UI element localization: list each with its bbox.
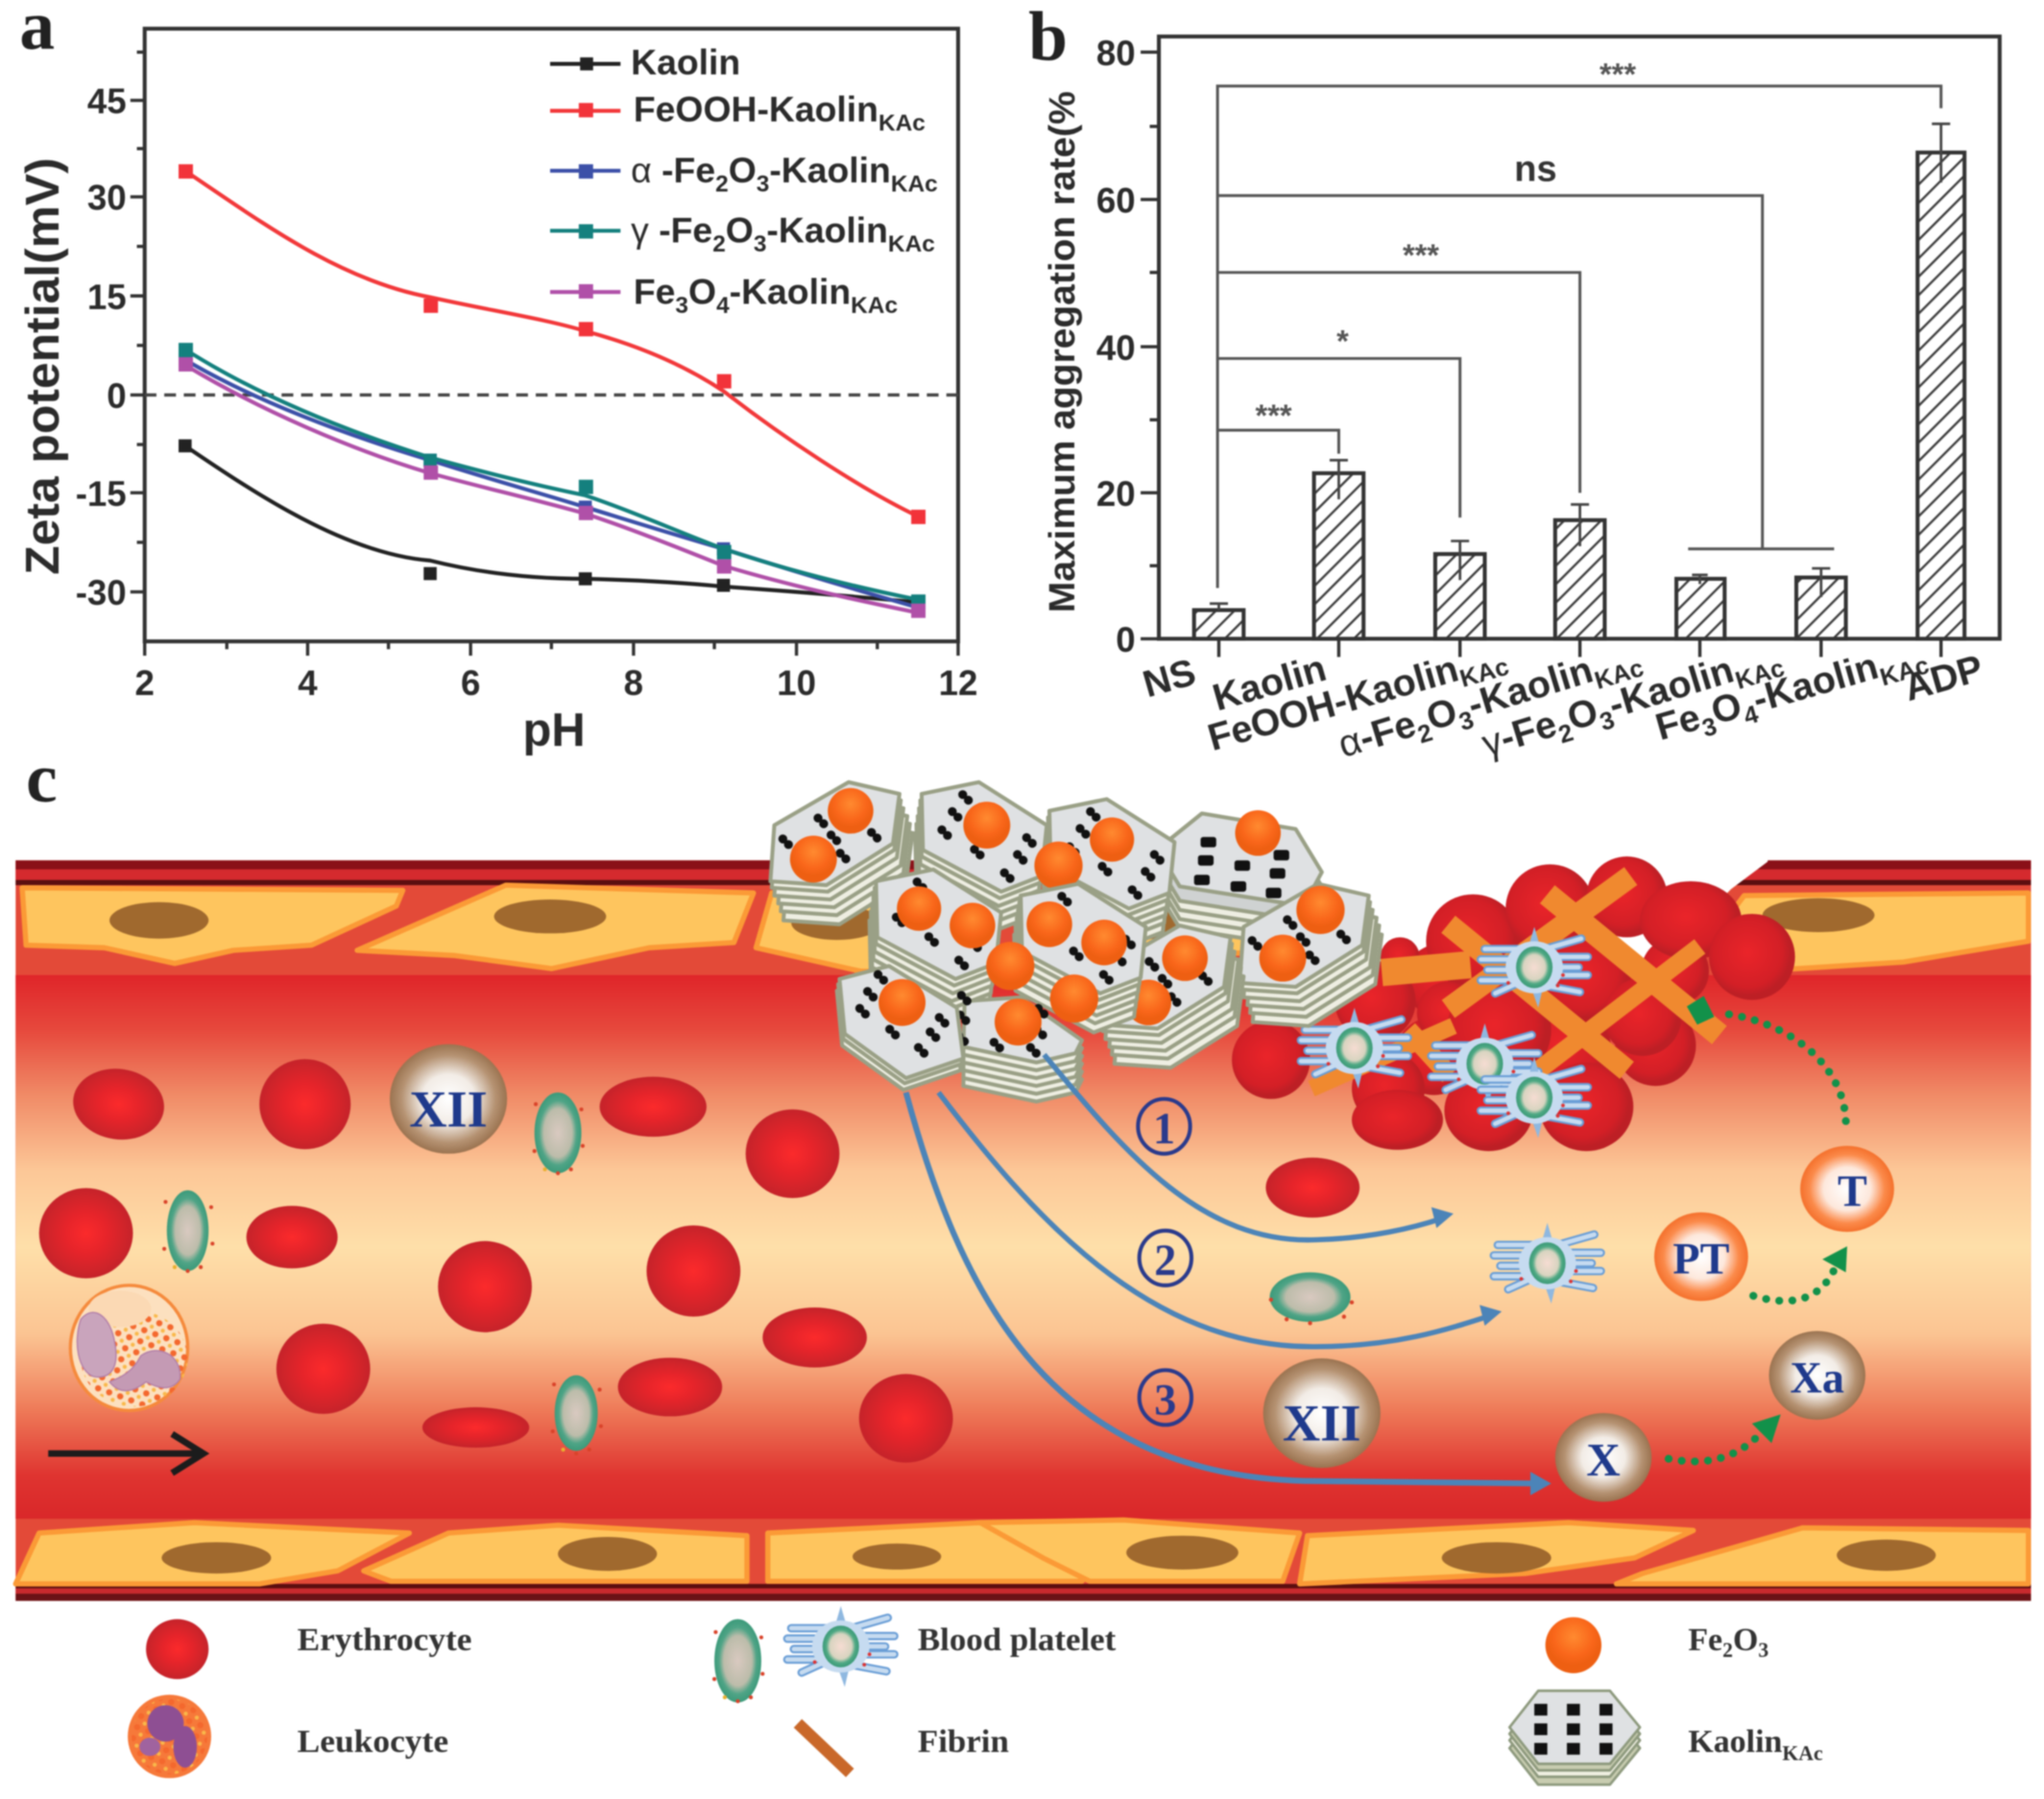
Fe2O3 key: O (1733, 1622, 1758, 1658)
rotated category labels: O (1422, 690, 1462, 739)
chart frame (1159, 36, 2000, 638)
factor X: X (1586, 1433, 1621, 1486)
series: alpha-Fe2O3-Kaolin (179, 353, 925, 609)
plate with two spheres (915, 782, 1083, 931)
factor XII in lumen (390, 1044, 507, 1154)
rotated category labels: 3 (1699, 713, 1719, 742)
chart legend: 3 (675, 293, 688, 319)
significance marks: * (1336, 324, 1349, 359)
Fe2O3 key (1546, 1618, 1768, 1673)
y tick labels: 0 (1116, 620, 1136, 660)
plate with spheres (1014, 884, 1145, 1033)
factor XII in lumen: XII (409, 1080, 488, 1138)
pathway number 3 (1140, 1370, 1191, 1425)
chart legend: KAc (888, 231, 935, 257)
rotated category labels: 3 (1597, 707, 1618, 736)
rotated category labels: Fe (1651, 696, 1705, 749)
factor XII target: XII (1283, 1395, 1361, 1452)
chart legend: -Kaolin (769, 150, 891, 190)
panel b: maximum aggregation rate bar chart (1028, 0, 2000, 772)
chart legend: KAc (851, 293, 898, 319)
leukocyte key (128, 1694, 448, 1778)
loose spheres (986, 942, 1098, 1022)
flow direction arrow (48, 1434, 204, 1474)
prothrombin PT: PT (1672, 1235, 1730, 1283)
blood platelet key (712, 1606, 1117, 1703)
error bars (1210, 124, 1950, 611)
rotated category labels: O (1562, 690, 1602, 739)
rotated category labels: 3 (1456, 707, 1477, 736)
endothelial cells (15, 885, 2029, 1584)
hatched bars (1194, 153, 1964, 638)
chart legend (550, 41, 938, 319)
x tick labels: 4 (298, 663, 318, 703)
chart legend: O (729, 150, 757, 190)
y tick labels (1096, 34, 1136, 660)
series: gamma-Fe2O3-Kaolin (179, 343, 926, 609)
chart legend: 4 (716, 293, 730, 319)
rotated category labels: KAc (1592, 655, 1647, 695)
kaolin key: KAc (1782, 1741, 1823, 1764)
rotated category labels (1139, 632, 1987, 772)
kaolin key: Kaolin (1688, 1724, 1782, 1760)
vessel wall (15, 860, 2031, 1601)
x tick labels: 2 (135, 663, 155, 703)
panel a: zeta potential line chart (17, 0, 977, 756)
panel letter c: c (26, 739, 58, 817)
significance marks: ns (1514, 150, 1557, 190)
y tick labels: 80 (1096, 34, 1136, 73)
axis ticks (1141, 52, 1941, 657)
wall rupture gap (1251, 834, 1770, 991)
plate with two spheres (1239, 884, 1382, 1026)
significance marks: *** (1403, 238, 1439, 273)
y tick labels: 45 (87, 82, 127, 121)
rotated category labels: Kaolin (1208, 647, 1331, 719)
vessel lumen (15, 975, 2031, 1519)
chart legend: KAc (878, 110, 926, 136)
significance brackets (1217, 86, 1941, 588)
panel c: blood vessel diagram (15, 782, 2031, 1601)
factor XII target (1263, 1358, 1381, 1468)
chart legend: Fe (634, 271, 675, 311)
rotated category labels: FeOOH-Kaolin (1203, 647, 1463, 759)
fibrin key: Fibrin (918, 1724, 1009, 1760)
x tick labels: 8 (624, 663, 643, 703)
pathway number 3: 3 (1154, 1375, 1176, 1424)
resting platelets (162, 1092, 1354, 1455)
erythrocytes in the lumen (39, 1059, 1359, 1463)
x tick labels: 12 (939, 663, 977, 703)
zero dashed line (145, 394, 958, 396)
y tick labels: 40 (1096, 328, 1136, 368)
factor Xa (1769, 1331, 1865, 1420)
rotated category labels: KAc (1877, 652, 1932, 691)
leukocyte key: Leukocyte (298, 1724, 448, 1760)
chart legend: KAc (891, 172, 938, 198)
kaolin-iron oxide composite cluster (770, 782, 1382, 1101)
prothrombin PT (1654, 1212, 1748, 1301)
chart legend: -Kaolin (730, 271, 851, 311)
y tick labels (76, 82, 127, 612)
y tick labels: -30 (76, 573, 127, 612)
front plate with one sphere (959, 995, 1082, 1101)
erythrocyte key: Erythrocyte (298, 1622, 472, 1658)
Fe2O3 key: Fe (1688, 1622, 1722, 1658)
plate with two spheres (1043, 799, 1174, 947)
plate with two spheres (770, 782, 912, 924)
thrombin T: T (1838, 1166, 1867, 1215)
rotated category labels: 2 (1555, 719, 1576, 749)
chart legend: O (726, 210, 754, 251)
thrombin T (1800, 1146, 1894, 1232)
pathway 2 arrow (939, 1092, 1502, 1347)
pathway number 2 (1140, 1231, 1191, 1285)
pathway number 2: 2 (1154, 1235, 1176, 1284)
series: Kaolin (179, 440, 925, 609)
rotated category labels: α-Fe (1334, 703, 1421, 766)
chart legend: -Kaolin (766, 210, 888, 251)
rotated category labels: -Kaolin (1603, 649, 1739, 727)
rotated category labels: O (1706, 684, 1746, 732)
rotated category labels: 4 (1741, 701, 1762, 731)
green arrow T to fibrin (1687, 995, 1846, 1121)
activated platelets (1301, 927, 1588, 1139)
pathway number 1: 1 (1153, 1104, 1175, 1153)
front plate with one sphere (837, 966, 963, 1090)
rotated category labels: -Kaolin (1463, 649, 1598, 727)
y tick labels: 15 (87, 277, 127, 317)
plate with two spheres (1101, 925, 1243, 1067)
x tick labels: 6 (461, 663, 480, 703)
pathway 3 arrow (906, 1092, 1551, 1496)
green arrow X to Xa (1669, 1414, 1781, 1461)
significance marks: *** (1256, 398, 1292, 433)
y tick labels: 60 (1096, 180, 1136, 220)
x axis title: pH (522, 705, 586, 756)
rotated category labels: -Kaolin (1748, 645, 1883, 721)
erythrocyte key (146, 1619, 472, 1679)
blood platelet key: Blood platelet (918, 1622, 1117, 1658)
clot erythrocytes (1232, 856, 1795, 1151)
chart legend: 2 (712, 231, 726, 257)
kaolin key (1509, 1691, 1823, 1785)
fibrin key (798, 1723, 1009, 1773)
plate with regular pores (1168, 810, 1322, 947)
chart legend: FeOOH-Kaolin (634, 88, 878, 129)
series: Fe3O4-Kaolin (179, 357, 926, 618)
axis ticks (131, 52, 958, 656)
pathway number 1 (1138, 1099, 1190, 1154)
activated platelet target (1494, 1223, 1600, 1304)
chart frame (145, 29, 958, 641)
green arrow PT to T (1753, 1246, 1847, 1301)
rotated category labels: ADP (1899, 647, 1987, 709)
rotated category labels: NS (1139, 651, 1200, 706)
Fe2O3 key: 2 (1722, 1639, 1733, 1662)
leukocyte (70, 1285, 188, 1410)
y tick labels: -15 (76, 474, 127, 514)
significance marks: *** (1599, 57, 1636, 91)
chart legend: α -Fe (631, 150, 715, 190)
legend (128, 1606, 1823, 1785)
factor X (1555, 1413, 1651, 1501)
rotated category labels: KAc (1732, 655, 1788, 695)
Fe2O3 key: 3 (1758, 1639, 1768, 1662)
significance marks (1256, 57, 1636, 433)
chart legend: 3 (754, 231, 766, 257)
x tick labels: 10 (777, 663, 816, 703)
chart legend: Kaolin (631, 41, 740, 82)
y tick labels: 0 (107, 376, 127, 416)
rotated category labels: KAc (1457, 654, 1512, 693)
series: FeOOH-Kaolin (179, 164, 926, 524)
y tick labels: 30 (87, 179, 127, 218)
chart legend: 3 (757, 172, 769, 198)
fibrin clot (1232, 856, 1795, 1151)
x tick labels (135, 663, 977, 703)
y axis title: Zeta potential(mV) (17, 157, 69, 575)
fibrin strands (1311, 876, 1719, 1089)
rotated category labels: γ-Fe (1477, 703, 1561, 765)
factor Xa: Xa (1791, 1353, 1844, 1402)
endothelial nuclei (109, 899, 1936, 1573)
y axis title: Maximum aggregation rate(% (1043, 91, 1083, 612)
chart legend: γ -Fe (631, 210, 712, 251)
chart legend: O (688, 271, 716, 311)
chart legend: 2 (715, 172, 729, 198)
pathway 1 arrow (1045, 1055, 1454, 1240)
rotated category labels: 2 (1415, 719, 1435, 749)
plate with spheres (870, 870, 1001, 1019)
y tick labels: 20 (1096, 474, 1136, 514)
